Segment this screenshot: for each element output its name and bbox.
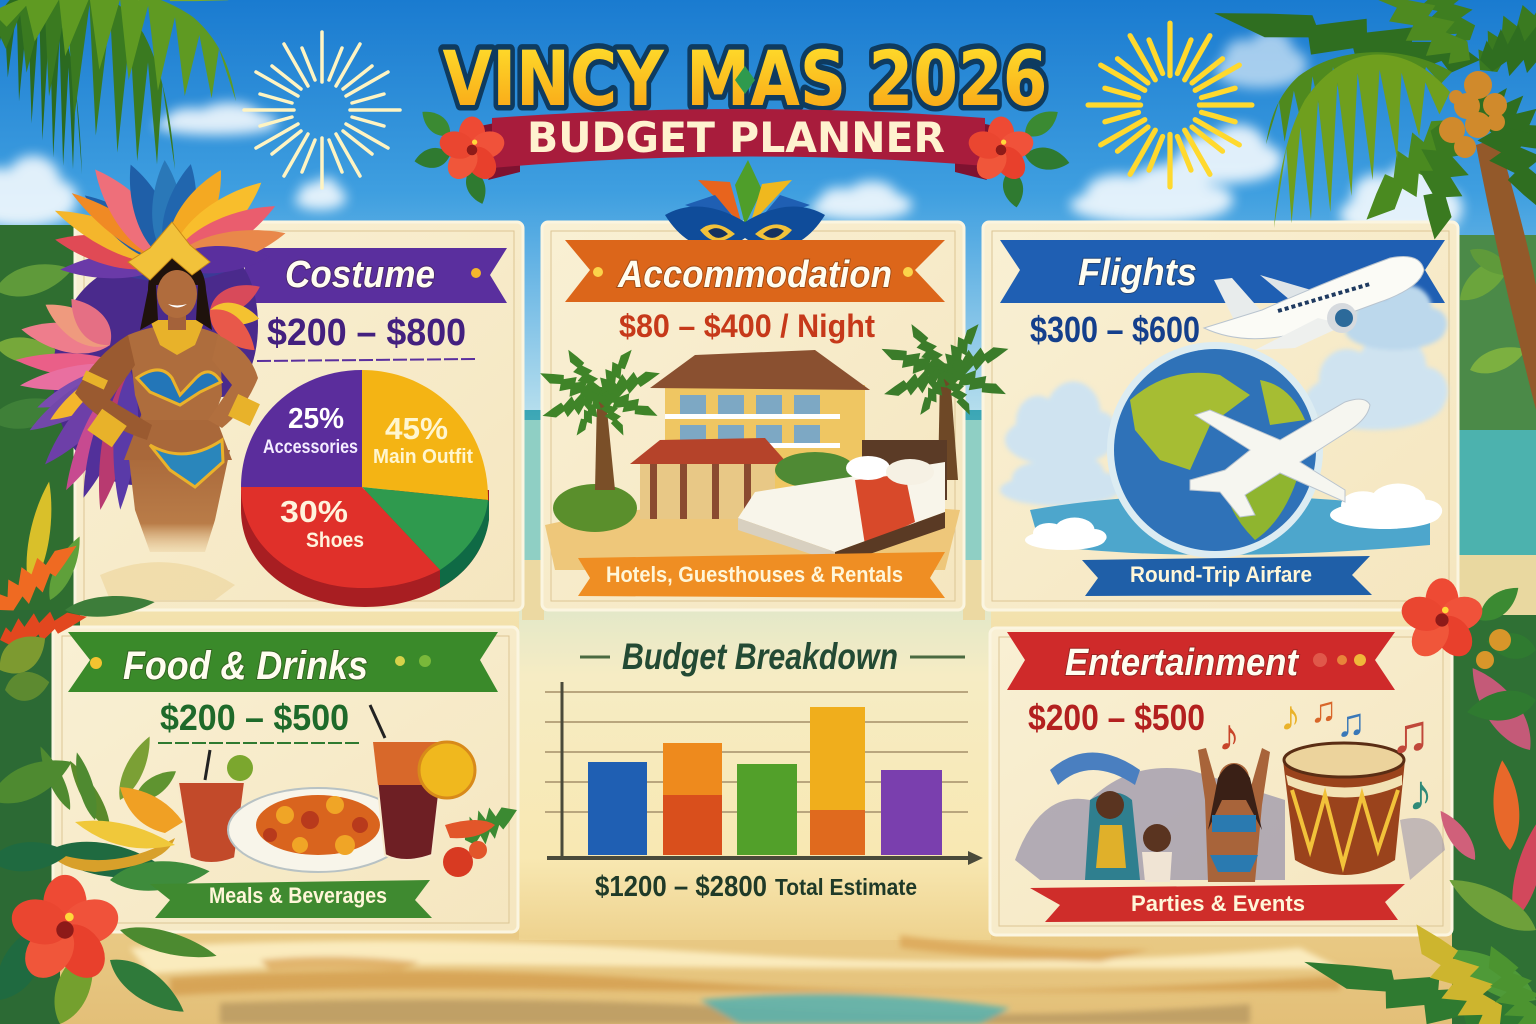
icon: right firework (1088, 23, 1252, 187)
panel: costume card (75, 222, 523, 610)
caption: entertainment: Parties & Events (1131, 891, 1305, 916)
illustration: carnival dancer (14, 159, 289, 552)
foliage: lower-right tropical plants and hibiscus (1297, 578, 1536, 1024)
caption: accommodation (578, 552, 945, 598)
heading: entertainment ribbon: Entertainment (1065, 642, 1299, 684)
illustration: revellers, drum and music notes: ♪ (1218, 711, 1240, 760)
illustration: globe, clouds and planes (1000, 256, 1448, 558)
caption: flights: Round-Trip Airfare (1130, 562, 1312, 587)
panel: entertainment card (990, 628, 1452, 935)
costume pie chart: 45% (385, 411, 448, 446)
costume pie chart: Accessories (263, 437, 358, 458)
icon: top-left palm leaves (0, 0, 236, 175)
heading: costume ribbon: Costume (285, 254, 435, 296)
heading: flights ribbon (1000, 240, 1445, 303)
title: VINCY MAS 2026 (442, 34, 1048, 123)
heading: costume ribbon (245, 248, 507, 303)
panel: food and drinks card (53, 627, 518, 932)
bar chart (545, 682, 983, 865)
flights price: $300 – $600 (1030, 309, 1200, 350)
caption: food (150, 880, 432, 918)
heading: food and drinks ribbon (68, 632, 498, 692)
illustration: revellers, drum and music notes: ♪ (1280, 692, 1301, 739)
heading: accommodation ribbon (565, 240, 945, 302)
food price: $200 – $500 (160, 697, 349, 738)
costume pie chart (241, 370, 489, 607)
total estimate: Total Estimate (775, 874, 917, 900)
costume price: $200 – $800 (267, 312, 466, 354)
caption: accommodation: Hotels, Guesthouses & Rentals (606, 562, 903, 587)
icon: carnival mask (665, 160, 825, 249)
banner: budget planner (470, 109, 1005, 180)
illustration: revellers, drum and music notes: ♫ (1390, 704, 1430, 764)
total estimate: $1200 – $2800 (595, 871, 767, 903)
illustration: revellers, drum and music notes: ♪ (1408, 765, 1433, 821)
costume pie chart: 30% (280, 494, 348, 529)
icon: top-right coconut palm (1209, 0, 1536, 410)
illustration: revellers, drum and music notes (1015, 689, 1445, 882)
icon: left hibiscus (413, 105, 508, 207)
heading: food and drinks ribbon: Food & Drinks (123, 644, 368, 688)
entertainment price: $200 – $500 (1028, 697, 1205, 738)
illustration: revellers, drum and music notes: ♫ (1336, 701, 1366, 745)
banner: budget planner: BUDGET PLANNER (527, 113, 945, 162)
costume pie chart: Main Outfit (373, 446, 473, 468)
caption: entertainment (1030, 884, 1405, 922)
costume pie chart: 25% (288, 403, 344, 435)
panel: accommodation card (542, 222, 964, 610)
panel: flights card (983, 222, 1458, 610)
icon: left firework (244, 32, 400, 188)
illustration: meal, fruit and drinks (34, 705, 524, 894)
heading: flights ribbon: Flights (1078, 252, 1197, 294)
accommodation price: $80 – $400 / Night (619, 308, 875, 344)
heading: budget breakdown: Budget Breakdown (622, 636, 898, 677)
costume pie chart: Shoes (306, 529, 364, 552)
heading: entertainment ribbon (1007, 632, 1395, 690)
caption: food: Meals & Beverages (209, 883, 387, 908)
heading: accommodation ribbon: Accommodation (617, 254, 892, 296)
foliage: lower-left tropical plants and hibiscus (0, 480, 219, 1024)
icon: right hibiscus (965, 104, 1071, 209)
illustration: revellers, drum and music notes: ♫ (1310, 689, 1337, 730)
illustration: hotel, palms and bed (536, 318, 1012, 570)
total estimate (595, 871, 917, 903)
caption: flights (1082, 556, 1372, 596)
